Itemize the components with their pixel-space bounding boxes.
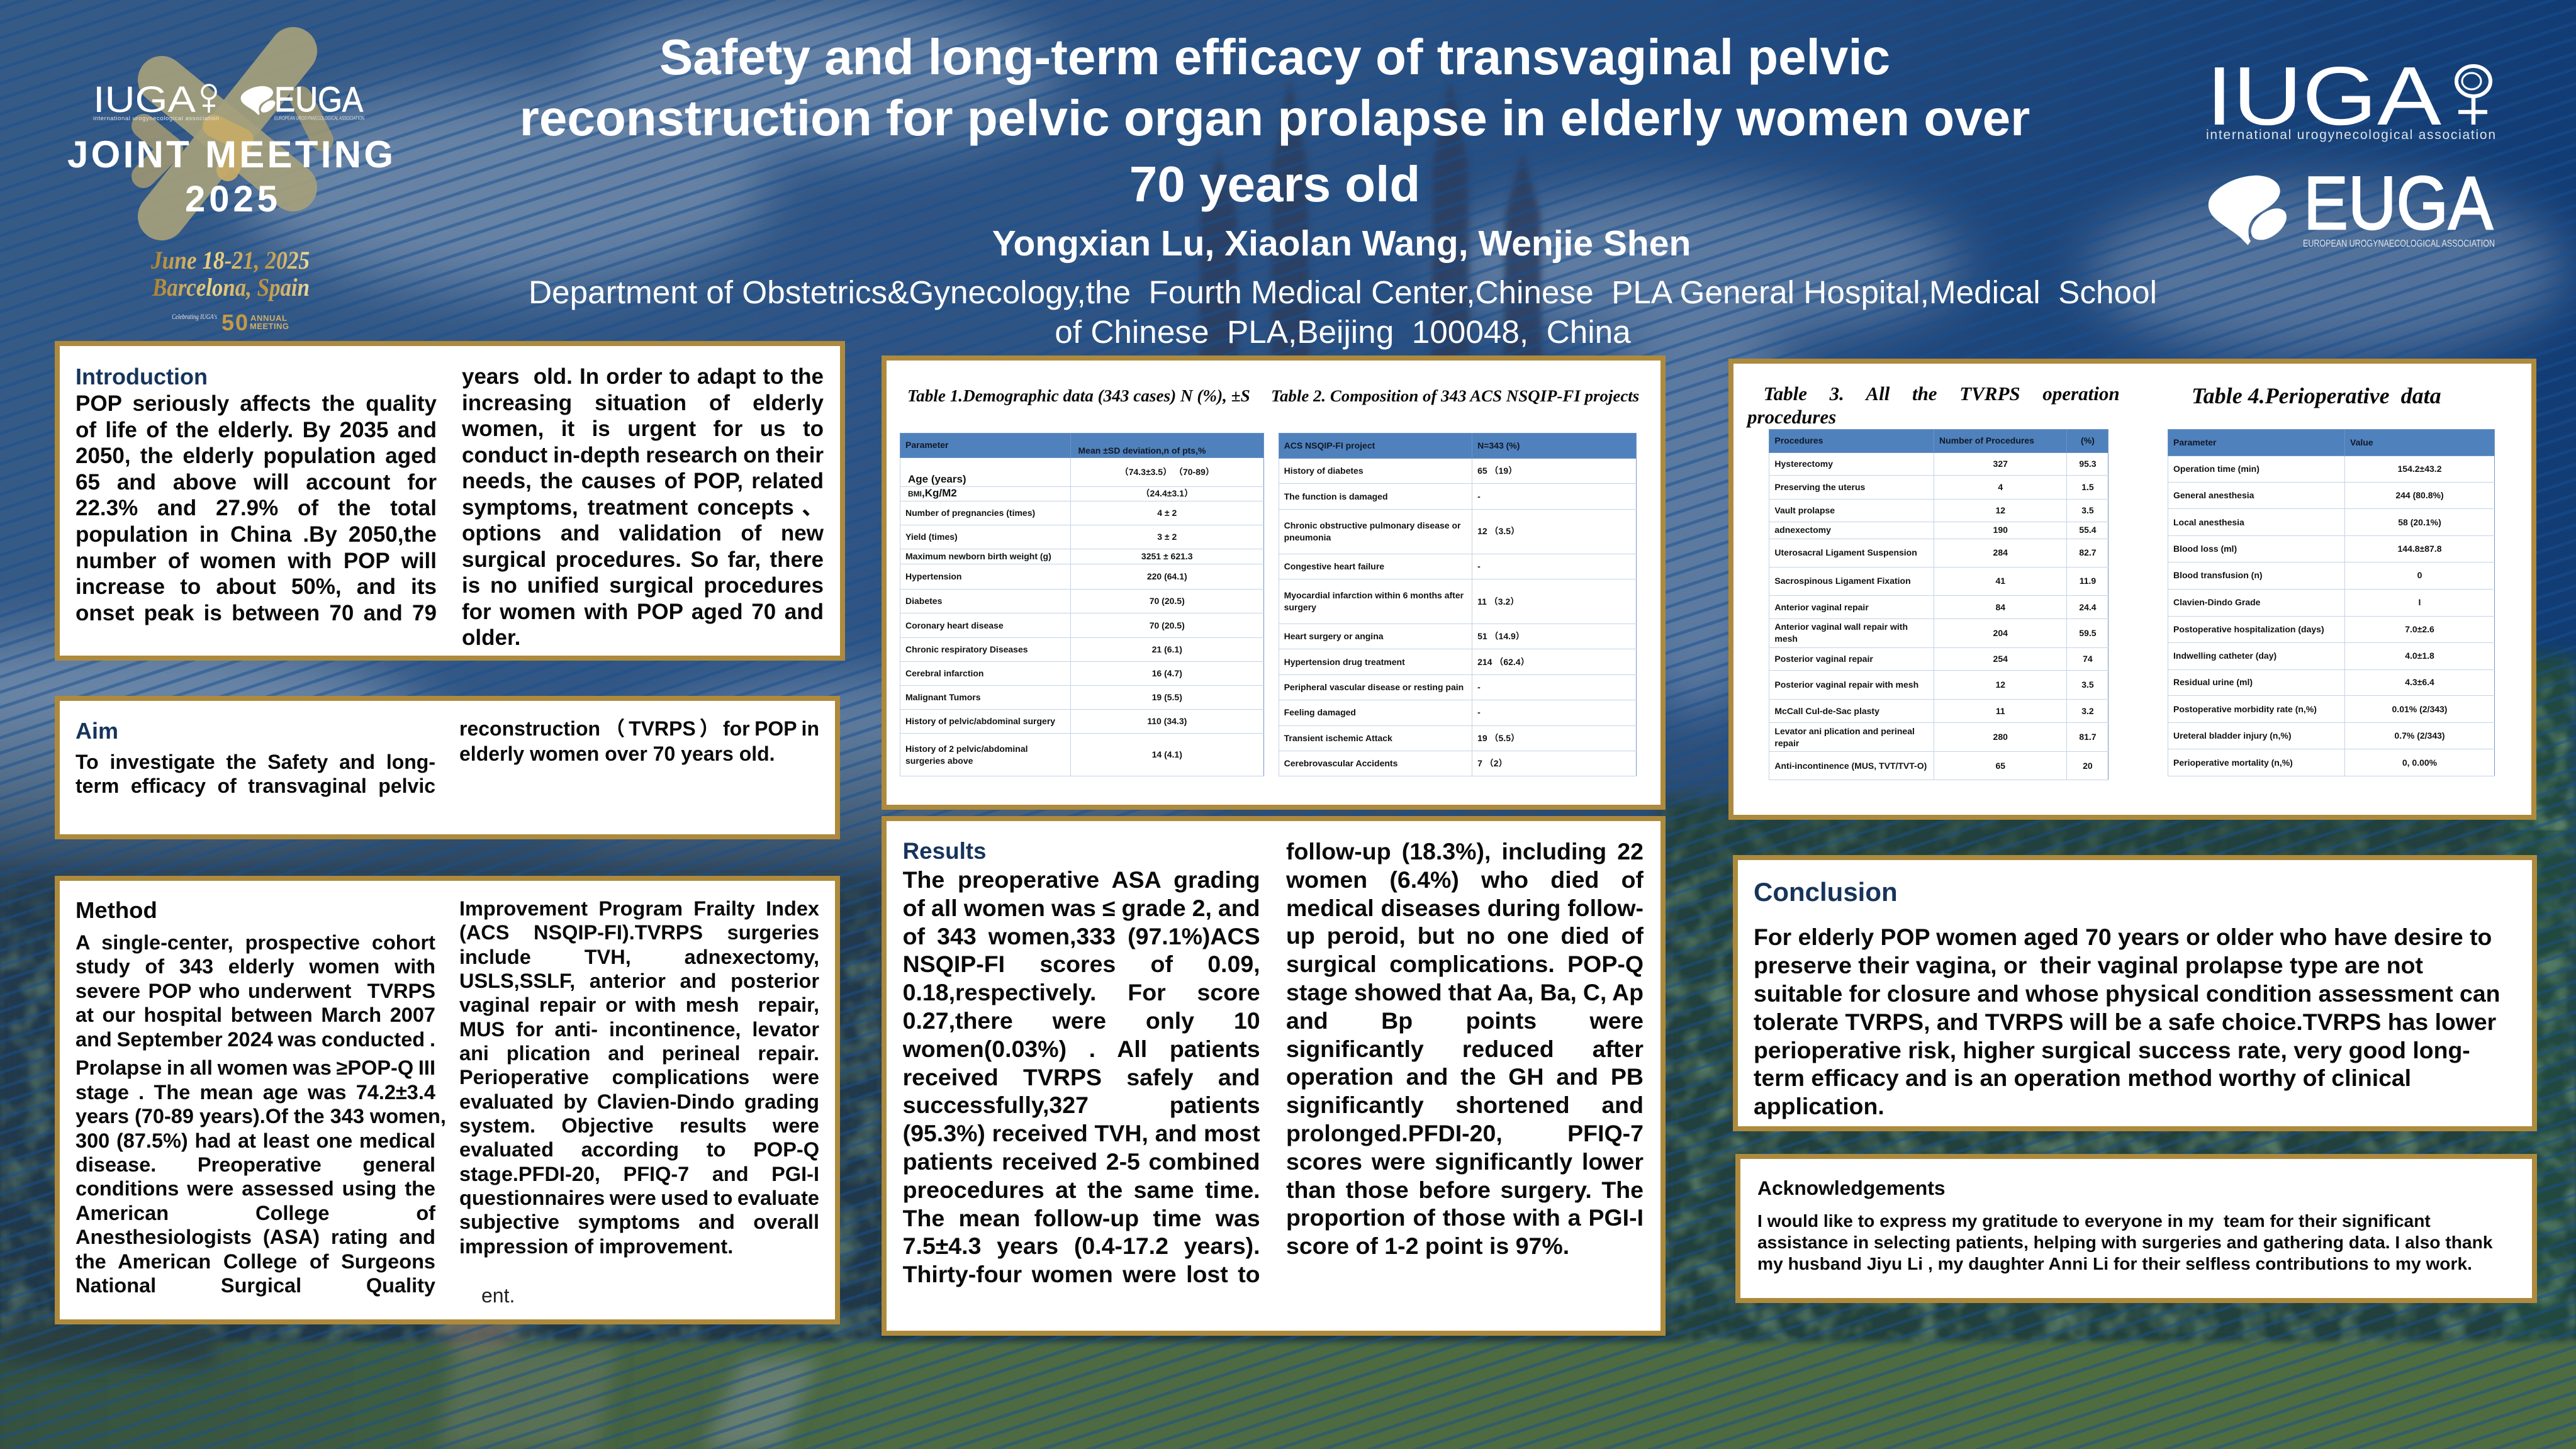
table 1: demographic data: 3251 ± 621.3 bbox=[1141, 551, 1193, 561]
text: acknowledgements body bbox=[1757, 1210, 2493, 1275]
text: method column 1: American College of bbox=[76, 1202, 435, 1224]
text: results column 2: stage showed that Aa, Ba, C, Ap bbox=[1286, 979, 1644, 1005]
table 3: TVRPS procedures: Posterior vaginal repair bbox=[1774, 654, 1873, 664]
text: introduction column 2: conduct in-depth research on their bbox=[462, 443, 824, 467]
table 3: TVRPS procedures: Number of Procedures bbox=[1939, 435, 2034, 445]
text: conclusion body: perioperative risk, higher surgical success rate, very good long- bbox=[1754, 1037, 2470, 1063]
text: introduction column 1: onset peak is between 70 and 79 bbox=[76, 601, 437, 625]
logo: small EUGA wordmark: EUGA bbox=[274, 79, 364, 119]
text: method column 1: study of 343 elderly women with bbox=[76, 955, 435, 978]
table 3: TVRPS procedures: 204 bbox=[1993, 628, 2008, 638]
text: method column 1: Anesthesiologists (ASA) rating and bbox=[76, 1226, 435, 1248]
text: results column 2: scores were significantly lower bbox=[1286, 1148, 1644, 1175]
table 3: TVRPS procedures: Preserving the uterus bbox=[1774, 482, 1865, 492]
table 2: ACS NSQIP-FI composition: 12 （3.5） bbox=[1477, 526, 1520, 536]
table 3: TVRPS procedures: 12 bbox=[1995, 505, 2005, 515]
heading: acknowledgements: Acknowledgements bbox=[1757, 1177, 1946, 1199]
table 1: demographic data: 110 (34.3) bbox=[1147, 716, 1187, 726]
table 4: perioperative data: General anesthesia bbox=[2173, 490, 2254, 500]
table 2: ACS NSQIP-FI composition: 65 （19） bbox=[1477, 466, 1517, 476]
table 3: TVRPS procedures: 81.7 bbox=[2079, 732, 2097, 742]
text: method column 2: include TVH, adnexectomy, bbox=[459, 946, 819, 968]
table 2: ACS NSQIP-FI composition: N=343 (%) bbox=[1477, 440, 1520, 450]
text: method column 1 bbox=[76, 931, 435, 1297]
text: introduction column 1: POP seriously affects the quality bbox=[76, 391, 437, 416]
table 1: demographic data: Number of pregnancies (times) bbox=[905, 507, 1035, 517]
table 3: TVRPS procedures: 3.5 bbox=[2081, 505, 2094, 515]
table 2: ACS NSQIP-FI composition: - bbox=[1477, 682, 1481, 692]
text: method column 2: impression of improvement. bbox=[459, 1235, 733, 1258]
table 1: demographic data: 14 (4.1) bbox=[1152, 749, 1182, 759]
table 1: demographic data: BMI,Kg/M2 bbox=[908, 487, 957, 499]
table 3: TVRPS procedures: 41 bbox=[1995, 576, 2005, 586]
table 1: demographic data: Hypertension bbox=[905, 571, 961, 581]
title: reconstruction for pelvic organ prolapse in elderly women over bbox=[520, 90, 2030, 146]
text: introduction column 2: surgical procedures. So far, there bbox=[462, 547, 824, 571]
table 2: ACS NSQIP-FI composition: 214 （62.4） bbox=[1477, 657, 1530, 667]
text: method column 2: stage.PFDI-20, PFIQ-7 and PGI-I bbox=[459, 1163, 819, 1185]
text: method column 2: ani plication and perineal repair. bbox=[459, 1042, 819, 1065]
table 3: TVRPS procedures: 3.2 bbox=[2081, 706, 2094, 716]
text: introduction column 2 bbox=[0, 364, 2576, 1449]
table 2: ACS NSQIP-FI composition: 7 （2） bbox=[1477, 758, 1508, 768]
caption: table 3: procedures bbox=[1747, 406, 1836, 428]
text: results column 1: received TVRPS safely and bbox=[903, 1064, 1260, 1090]
text: method column 2: subjective symptoms and overall bbox=[459, 1211, 819, 1233]
table 3: TVRPS procedures: 1.5 bbox=[2081, 482, 2094, 492]
table 1: demographic data: Maximum newborn birth weight (g) bbox=[905, 551, 1051, 561]
text: aim column 2: reconstruction （TVRPS）for POP in bbox=[459, 717, 819, 740]
text: acknowledgements body: I would like to express my gratitude to everyone in my team for their significant bbox=[1757, 1211, 2431, 1231]
text: introduction column 2: years old. In order to adapt to the bbox=[462, 364, 824, 389]
text: joint meeting 2025: 2025 bbox=[185, 179, 277, 220]
table 3: TVRPS procedures: 4 bbox=[1998, 482, 2003, 492]
text: results column 1: 7.5±4.3 years (0.4-17.2 years). bbox=[903, 1233, 1260, 1259]
title bbox=[520, 29, 2030, 212]
table 4: perioperative data: Local anesthesia bbox=[2173, 517, 2244, 527]
text: results column 1: successfully,327 patients bbox=[903, 1092, 1260, 1118]
text: results column 1: The mean follow-up time was bbox=[903, 1205, 1260, 1231]
text: conclusion body: preserve their vagina, or their vaginal prolapse type are not bbox=[1754, 952, 2423, 978]
affiliation: Department of Obstetrics&Gynecology,the Fourth Medical Center,Chinese PLA General Hospital,Medical School bbox=[529, 274, 2157, 310]
text: meeting date and place: Barcelona, Spain bbox=[152, 273, 310, 301]
panel: introduction bbox=[55, 341, 2576, 1446]
conference logo: IUGA EUGA joint meeting 2025 bbox=[67, 27, 393, 335]
text: introduction column 1: 65 and above will account for bbox=[76, 470, 437, 495]
text: method column 2: USLS,SSLF, anterior and posterior bbox=[459, 970, 819, 992]
table 4: perioperative data: I bbox=[2419, 597, 2421, 607]
text: method column 1: and September 2024 was conducted . bbox=[76, 1028, 435, 1051]
table 1: demographic data: （74.3±3.5） （70-89） bbox=[1120, 467, 1214, 477]
panel: aim bbox=[0, 696, 2576, 1449]
text: stray word in method column 2: ent. bbox=[481, 1284, 515, 1307]
text: acknowledgements body: my husband Jiyu Li , my daughter Anni Li for their selfless contributions to my work. bbox=[1757, 1253, 2472, 1273]
table 2: ACS NSQIP-FI composition: Heart surgery or angina bbox=[1284, 631, 1384, 641]
table 2: ACS NSQIP-FI composition: - bbox=[1477, 561, 1481, 571]
logo: IUGA top right bbox=[804, 57, 2576, 1449]
table 1: demographic data: 21 (6.1) bbox=[1152, 644, 1182, 654]
text: introduction column 1 bbox=[76, 391, 2576, 1449]
text: conclusion body: suitable for closure and whose physical condition assessment can bbox=[1754, 980, 2500, 1007]
table 4: perioperative data: 4.0±1.8 bbox=[2405, 651, 2434, 661]
table 3: TVRPS procedures: Anterior vaginal wall repair with bbox=[1774, 622, 1908, 632]
table 3: TVRPS procedures: Uterosacral Ligament Suspension bbox=[1774, 547, 1917, 557]
table 3: TVRPS procedures: adnexectomy bbox=[1774, 525, 1831, 535]
table 3: TVRPS procedures: Sacrospinous Ligament Fixation bbox=[1774, 576, 1911, 586]
text: results column 2: significantly reduced after bbox=[1286, 1036, 1644, 1062]
logo: small IUGA wordmark: IUGA bbox=[93, 79, 196, 120]
table 1: demographic data: 70 (20.5) bbox=[1150, 620, 1185, 630]
table 2: ACS NSQIP-FI composition: 11 （3.2） bbox=[1477, 596, 1519, 607]
icon: gold X emblem bbox=[143, 51, 322, 216]
text: aim column 2: elderly women over 70 years old. bbox=[459, 742, 775, 765]
table 4: perioperative data: Operation time (min) bbox=[2173, 464, 2260, 474]
table 3: TVRPS procedures: 82.7 bbox=[2079, 547, 2097, 557]
table 1: demographic data: History of pelvic/abdominal surgery bbox=[905, 716, 1055, 726]
text: meeting date and place bbox=[150, 246, 310, 301]
authors: Yongxian Lu, Xiaolan Wang, Wenjie Shen bbox=[992, 223, 1691, 264]
title: Safety and long-term efficacy of transvaginal pelvic bbox=[659, 29, 1890, 85]
table 3: TVRPS procedures: 84 bbox=[1995, 602, 2005, 612]
table 2: ACS NSQIP-FI composition: ACS NSQIP-FI project bbox=[1284, 440, 1375, 450]
logo: small IUGA wordmark bbox=[93, 79, 219, 122]
table 3: TVRPS procedures: Anti-incontinence (MUS, TVT/TVT-O) bbox=[1774, 761, 1927, 771]
table 1: demographic data: Chronic respiratory Diseases bbox=[905, 644, 1028, 654]
text: method column 1: years (70-89 years).Of the 343 women, bbox=[76, 1105, 446, 1127]
text: introduction column 2: symptoms, treatment concepts、 bbox=[462, 495, 824, 520]
text: introduction column 1: 22.3% and 27.9% of the total bbox=[76, 496, 437, 520]
table 1: demographic data: Coronary heart disease bbox=[905, 620, 1004, 630]
text: meeting date and place: June 18-21, 2025 bbox=[150, 246, 310, 274]
table 3: TVRPS procedures: 59.5 bbox=[2079, 628, 2097, 638]
text: method column 1: at our hospital between March 2007 bbox=[76, 1004, 435, 1026]
table 3: TVRPS procedures: 55.4 bbox=[2079, 525, 2097, 535]
text: method column 1: conditions were assessed using the bbox=[76, 1177, 435, 1200]
table 1: demographic data bbox=[900, 433, 1264, 776]
caption: table 4: Table 4.Perioperative data bbox=[2192, 383, 2441, 408]
logo: small EUGA wordmark: EUROPEAN UROGYNAECOLOGICAL ASSOCIATION bbox=[274, 115, 364, 121]
text: introduction column 2: for women with POP aged 70 and bbox=[462, 599, 824, 624]
text: results column 1: (95.3%) received TVH, and most bbox=[903, 1120, 1260, 1146]
table 4: perioperative data: Blood transfusion (n) bbox=[2173, 570, 2263, 580]
text: results column 1: of all women was ≤ grade 2, and bbox=[903, 895, 1260, 921]
text: method column 1: severe POP who underwent TVRPS bbox=[76, 980, 435, 1002]
text: results column 1: women(0.03%) . All patients bbox=[903, 1036, 1260, 1062]
text: method column 1: 300 (87.5%) had at least one medical bbox=[76, 1129, 435, 1152]
table 4: perioperative data: Perioperative mortality (n,%) bbox=[2173, 758, 2293, 768]
table 1: demographic data: 19 (5.5) bbox=[1152, 692, 1182, 702]
table 2: ACS NSQIP-FI composition: Congestive heart failure bbox=[1284, 561, 1384, 571]
text: method column 1: National Surgical Quality bbox=[76, 1274, 435, 1297]
text: results column 2: significantly shortened and bbox=[1286, 1092, 1644, 1118]
table 4: perioperative data: Value bbox=[2350, 437, 2373, 447]
text: introduction column 2: women, it is urgent for us to bbox=[462, 417, 824, 441]
table 2: ACS NSQIP-FI composition: 19 （5.5） bbox=[1477, 733, 1520, 743]
text: aim column 1 bbox=[76, 750, 435, 798]
table 3: TVRPS procedures: Procedures bbox=[1774, 435, 1823, 445]
table 4: perioperative data: 58 (20.1%) bbox=[2398, 517, 2441, 527]
text: introduction column 1: increase to about 50%, and its bbox=[76, 574, 437, 599]
table 2: ACS NSQIP-FI composition: pneumonia bbox=[1284, 532, 1331, 542]
text: results column 2: and Bp points were bbox=[1286, 1007, 1644, 1034]
table 1: demographic data: Parameter bbox=[905, 440, 949, 450]
text: conclusion body: tolerate TVRPS, and TVRPS will be a safe choice.TVRPS has lower bbox=[1754, 1009, 2496, 1035]
text: results column 1: patients received 2-5 combined bbox=[903, 1148, 1260, 1175]
heading: introduction: Introduction bbox=[76, 364, 208, 389]
table 1: demographic data: History of 2 pelvic/abdominal bbox=[905, 744, 1028, 754]
table 1: demographic data: Diabetes bbox=[905, 596, 942, 606]
text: results column 2: than those before surgery. The bbox=[1286, 1177, 1644, 1203]
table 2: ACS NSQIP-FI composition: Peripheral vascular disease or resting pain bbox=[1284, 682, 1464, 692]
text: results column 2: prolonged.PFDI-20, PFIQ-7 bbox=[1286, 1120, 1644, 1146]
table 1: demographic data: surgeries above bbox=[905, 756, 973, 766]
heading: aim: Aim bbox=[76, 718, 118, 744]
table 3: TVRPS procedures: 3.5 bbox=[2081, 680, 2094, 690]
heading: method: Method bbox=[76, 897, 157, 923]
table 4: perioperative data: Parameter bbox=[2173, 437, 2216, 447]
table 2: ACS NSQIP-FI composition: Chronic obstructive pulmonary disease or bbox=[1284, 520, 1460, 530]
text: method column 2: vaginal repair or with mesh repair, bbox=[459, 993, 819, 1016]
text: method column 2 bbox=[459, 897, 819, 1258]
text: method column 1: disease. Preoperative general bbox=[76, 1153, 435, 1176]
table 4: perioperative data: 154.2±43.2 bbox=[2398, 464, 2441, 474]
table 1: demographic data: 3 ± 2 bbox=[1157, 532, 1177, 542]
table 2: ACS NSQIP-FI composition: Transient ischemic Attack bbox=[1284, 733, 1392, 743]
text: method column 2: system. Objective results were bbox=[459, 1114, 819, 1137]
heading: results: Results bbox=[903, 838, 987, 864]
table 3: TVRPS procedures: 20 bbox=[2083, 761, 2093, 771]
table 4: perioperative data: Postoperative hospitalization (days) bbox=[2173, 624, 2324, 634]
table 4: perioperative data: 244 (80.8%) bbox=[2395, 490, 2444, 500]
text: results column 2: operation and the GH and PB bbox=[1286, 1063, 1644, 1090]
table 2: ACS NSQIP-FI composition: - bbox=[1477, 707, 1481, 717]
table 4: perioperative data: 0 bbox=[2417, 570, 2422, 580]
text: results column 2: medical diseases during follow- bbox=[1286, 895, 1644, 921]
text: introduction column 2: needs, the causes of POP, related bbox=[462, 469, 824, 493]
table 2: ACS NSQIP-FI composition: Feeling damaged bbox=[1284, 707, 1356, 717]
text: introduction column 2: is no unified surgical procedures bbox=[462, 573, 824, 598]
table 3: TVRPS procedures bbox=[1769, 429, 2108, 780]
table 3: TVRPS procedures: 327 bbox=[1993, 459, 2008, 469]
panel: method bbox=[55, 876, 840, 1324]
text: aim column 2 bbox=[459, 717, 819, 766]
table 2: ACS NSQIP-FI composition: Myocardial infarction within 6 months after bbox=[1284, 590, 1464, 600]
table 4: perioperative data: Indwelling catheter (day) bbox=[2173, 651, 2276, 661]
table 1: demographic data: 220 (64.1) bbox=[1147, 571, 1187, 581]
text: results column 2: women (6.4%) who died of bbox=[1286, 866, 1644, 893]
table 3: TVRPS procedures: 284 bbox=[1993, 547, 2008, 557]
heading: conclusion: Conclusion bbox=[1754, 877, 1898, 907]
table 4: perioperative data: Postoperative morbidity rate (n,%) bbox=[2173, 704, 2317, 714]
table 4: perioperative data: 4.3±6.4 bbox=[2405, 677, 2434, 687]
text: method column 2: MUS for anti- incontinence, levator bbox=[459, 1018, 819, 1041]
table 3: TVRPS procedures: McCall Cul-de-Sac plasty bbox=[1774, 706, 1879, 716]
text: method column 2: evaluated according to POP-Q bbox=[459, 1138, 819, 1161]
text: introduction column 2: increasing situation of elderly bbox=[462, 390, 824, 415]
text: conclusion body: term efficacy and is an operation method worthy of clinical bbox=[1754, 1065, 2411, 1091]
table 1: demographic data: Cerebral infarction bbox=[905, 668, 983, 678]
table 1: demographic data: 70 (20.5) bbox=[1150, 596, 1185, 606]
table 4: perioperative data: Residual urine (ml) bbox=[2173, 677, 2253, 687]
text: results column 1: NSQIP-FI scores of 0.09, bbox=[903, 951, 1260, 977]
table 3: TVRPS procedures: 280 bbox=[1993, 732, 2008, 742]
table 2: ACS NSQIP-FI composition: 51 （14.9） bbox=[1477, 631, 1525, 641]
text: results column 2: proportion of those with a PGI-I bbox=[1286, 1204, 1644, 1231]
table 3: TVRPS procedures: 65 bbox=[1995, 761, 2005, 771]
text: introduction column 1: 2050, the elderly population aged bbox=[76, 444, 437, 468]
table 1: demographic data: 16 (4.7) bbox=[1152, 668, 1182, 678]
text: method column 1: Prolapse in all women was ≥POP-Q III bbox=[76, 1056, 435, 1079]
text: results column 1: 0.18,respectively. For score bbox=[903, 979, 1260, 1005]
table 1: demographic data: Yield (times) bbox=[905, 532, 958, 542]
table 4: perioperative data: Ureteral bladder injury (n,%) bbox=[2173, 730, 2291, 741]
logo: small IUGA wordmark: international urogynecological association bbox=[93, 115, 219, 122]
text: results column 1: Thirty-four women were lost to bbox=[903, 1261, 1260, 1287]
table 4: perioperative data: Blood loss (ml) bbox=[2173, 544, 2237, 554]
panel: acknowledgements bbox=[1735, 1154, 2537, 1303]
table 3: TVRPS procedures: 11 bbox=[1996, 706, 2005, 716]
table 3: TVRPS procedures: 12 bbox=[1995, 680, 2005, 690]
table 2: ACS NSQIP-FI composition: History of diabetes bbox=[1284, 466, 1364, 476]
table 3: TVRPS procedures: repair bbox=[1774, 738, 1799, 748]
text: results column 1: preocedures at the same time. bbox=[903, 1177, 1260, 1203]
text: acknowledgements body: assistance in selecting patients, helping with surgeries and gathering data. I also thank bbox=[1757, 1232, 2493, 1252]
text: method column 2: (ACS NSQIP-FI).TVRPS surgeries bbox=[459, 921, 819, 944]
table 4: perioperative data: 0.01% (2/343) bbox=[2392, 704, 2447, 714]
panel: results bbox=[882, 816, 1666, 1336]
text: introduction column 1: number of women with POP will bbox=[76, 549, 437, 573]
panel: tables 1 and 2 bbox=[882, 355, 1666, 810]
table 2: ACS NSQIP-FI composition: Cerebrovascular Accidents bbox=[1284, 758, 1397, 768]
text: introduction column 1: population in China .By 2050,the bbox=[76, 522, 437, 547]
table 4: perioperative data: 0, 0.00% bbox=[2402, 758, 2437, 768]
text: joint meeting 2025: JOINT MEETING bbox=[67, 133, 393, 176]
table 1: demographic data: Malignant Tumors bbox=[905, 692, 981, 702]
text: method column 1: the American College of Surgeons bbox=[76, 1250, 435, 1273]
table 3: TVRPS procedures: Anterior vaginal repair bbox=[1774, 602, 1869, 612]
text: 50th annual meeting badge: 50 bbox=[221, 310, 248, 335]
table 1: demographic data: Mean ±SD deviation,n of pts,% bbox=[1078, 445, 1206, 456]
caption: table 3 bbox=[1728, 359, 2169, 428]
text: results column 1: The preoperative ASA grading bbox=[903, 866, 1260, 893]
table 3: TVRPS procedures: 254 bbox=[1993, 654, 2008, 664]
text: 50th annual meeting badge: ANNUAL bbox=[250, 313, 287, 323]
table 3: TVRPS procedures: Levator ani plication and perineal bbox=[1774, 726, 1915, 736]
caption: table 1: Table 1.Demographic data (343 cases) N (%), ±S bbox=[907, 386, 1250, 405]
text: results column 2 bbox=[1286, 837, 1644, 1260]
table 2: ACS NSQIP-FI composition bbox=[1279, 433, 1637, 776]
caption: table 2: Table 2. Composition of 343 ACS NSQIP-FI projects bbox=[1271, 386, 1639, 405]
text: introduction column 1: of life of the elderly. By 2035 and bbox=[76, 418, 437, 442]
text: method column 1: stage . The mean age was 74.2±3.4 bbox=[76, 1081, 435, 1104]
title: 70 years old bbox=[1129, 156, 1420, 212]
table 3: TVRPS procedures: Hysterectomy bbox=[1774, 459, 1833, 469]
table 3: TVRPS procedures: 24.4 bbox=[2079, 602, 2097, 612]
table 1: demographic data: Age (years) bbox=[908, 473, 966, 484]
table 3: TVRPS procedures: Vault prolapse bbox=[1774, 505, 1835, 515]
text: results column 1 bbox=[903, 866, 1260, 1289]
affiliation bbox=[529, 274, 2576, 1449]
text: method column 2: Improvement Program Frailty Index bbox=[459, 897, 819, 920]
text: 50th annual meeting badge bbox=[172, 310, 289, 335]
table 3: TVRPS procedures: 95.3 bbox=[2079, 459, 2097, 469]
text: method column 2: evaluated by Clavien-Dindo grading bbox=[459, 1090, 819, 1113]
table 1: demographic data: 4 ± 2 bbox=[1157, 507, 1177, 517]
text: introduction column 2: older. bbox=[462, 625, 520, 650]
table 3: TVRPS procedures: 74 bbox=[2083, 654, 2093, 664]
text: results column 2: up peroid, but no one died of bbox=[1286, 922, 1644, 949]
table 3: TVRPS procedures: Posterior vaginal repair with mesh bbox=[1774, 680, 1918, 690]
text: conclusion body: For elderly POP women aged 70 years or older who have desire to bbox=[1754, 924, 2492, 950]
table 4: perioperative data: 144.8±87.8 bbox=[2398, 544, 2441, 554]
table 4: perioperative data bbox=[2168, 429, 2495, 776]
text: aim column 1: To investigate the Safety and long- bbox=[76, 751, 435, 773]
table 4: perioperative data: 7.0±2.6 bbox=[2405, 624, 2434, 634]
affiliation: of Chinese PLA,Beijing 100048, China bbox=[1055, 313, 1631, 350]
table 3: TVRPS procedures: 190 bbox=[1993, 525, 2008, 535]
text: introduction column 2: options and validation of new bbox=[462, 521, 824, 545]
text: 50th annual meeting badge: MEETING bbox=[250, 322, 289, 331]
panel: tables 3 and 4 bbox=[1728, 359, 2536, 820]
table 3: TVRPS procedures: mesh bbox=[1774, 634, 1798, 644]
text: results column 2: follow-up (18.3%), including 22 bbox=[1286, 838, 1644, 864]
table 3: TVRPS procedures: (%) bbox=[2081, 435, 2095, 445]
table 2: ACS NSQIP-FI composition: The function is damaged bbox=[1284, 491, 1388, 501]
text: method column 1: A single-center, prospective cohort bbox=[76, 931, 435, 954]
text: method column 2: Perioperative complications were bbox=[459, 1066, 819, 1088]
table 2: ACS NSQIP-FI composition: - bbox=[1477, 491, 1481, 501]
panel: conclusion bbox=[1733, 855, 2537, 1131]
table 4: perioperative data: Clavien-Dindo Grade bbox=[2173, 597, 2260, 607]
text: method column 2: questionnaires were used to evaluate bbox=[459, 1187, 819, 1209]
text: results column 1: 0.27,there were only 10 bbox=[903, 1007, 1260, 1034]
table 2: ACS NSQIP-FI composition: Hypertension drug treatment bbox=[1284, 657, 1405, 667]
logo: small EUGA wordmark bbox=[241, 79, 364, 121]
text: results column 2: surgical complications. POP-Q bbox=[1286, 951, 1644, 977]
text: conclusion body bbox=[1754, 923, 2500, 1121]
table 4: perioperative data: 0.7% (2/343) bbox=[2394, 730, 2445, 741]
text: 50th annual meeting badge: Celebrating IUGA's bbox=[172, 312, 217, 321]
text: conclusion body: application. bbox=[1754, 1093, 1884, 1119]
table 1: demographic data: （24.4±3.1） bbox=[1141, 488, 1193, 498]
text: results column 2: score of 1-2 point is 97%. bbox=[1286, 1233, 1569, 1259]
text: results column 1: of 343 women,333 (97.1%)ACS bbox=[903, 923, 1260, 949]
caption: table 3: Table 3. All the TVRPS operation bbox=[1764, 383, 2120, 405]
table 3: TVRPS procedures: 11.9 bbox=[2080, 576, 2096, 586]
logo: IUGA top right: international urogynecological association bbox=[2206, 128, 2495, 142]
text: joint meeting 2025 bbox=[67, 133, 393, 220]
table 2: ACS NSQIP-FI composition: surgery bbox=[1284, 602, 1316, 612]
text: aim column 1: term efficacy of transvaginal pelvic bbox=[76, 775, 435, 797]
